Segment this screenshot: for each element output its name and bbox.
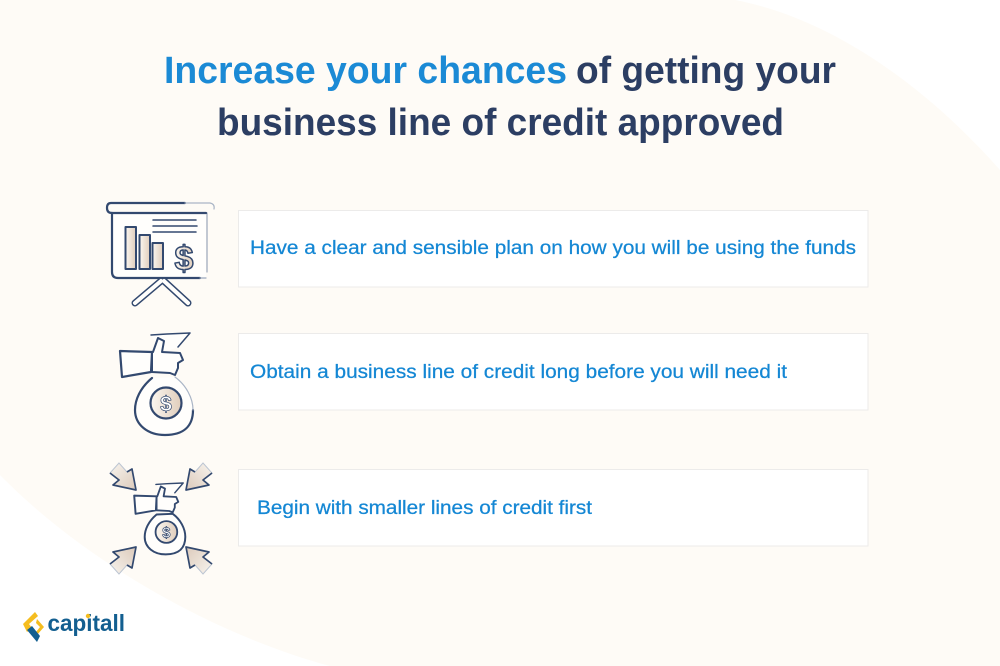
coin dollar: $ (160, 393, 172, 416)
logo: capitall (23, 610, 125, 642)
timing tip text: Obtain a business line of credit long before you will need it (250, 362, 788, 383)
arrow top left (110, 463, 136, 490)
arrow bottom left (110, 547, 136, 574)
hand (152, 338, 183, 375)
title (164, 50, 836, 144)
bar chart (126, 227, 163, 269)
title first line remainder: of getting your (576, 50, 836, 92)
arrow top right (186, 463, 212, 490)
logo wordmark: capitall (48, 610, 125, 636)
plan tip text: Have a clear and sensible plan on how you will be using the funds (250, 238, 856, 259)
board legs (135, 281, 188, 303)
small thumbs up and bag: $ (162, 526, 170, 542)
money bag (135, 377, 193, 435)
title highlighted phrase: Increase your chances (164, 50, 567, 92)
cuff (120, 351, 152, 377)
arrow bottom right (186, 547, 212, 574)
panel: smaller lines tip (238, 470, 868, 546)
icon: arrows pointing to money bag (110, 463, 212, 574)
dollar sign: $ (175, 240, 194, 278)
panel: plan tip (238, 210, 868, 287)
title second line: business line of credit approved (217, 102, 784, 144)
panel: timing tip (238, 334, 868, 410)
smaller lines tip text: Begin with smaller lines of credit first (257, 498, 593, 519)
logo dot (86, 614, 90, 618)
logo mark (23, 612, 44, 642)
bill (151, 333, 190, 350)
icon: thumbs up with money bag (120, 333, 193, 435)
icon: presentation board (107, 203, 214, 303)
coin (150, 388, 182, 418)
